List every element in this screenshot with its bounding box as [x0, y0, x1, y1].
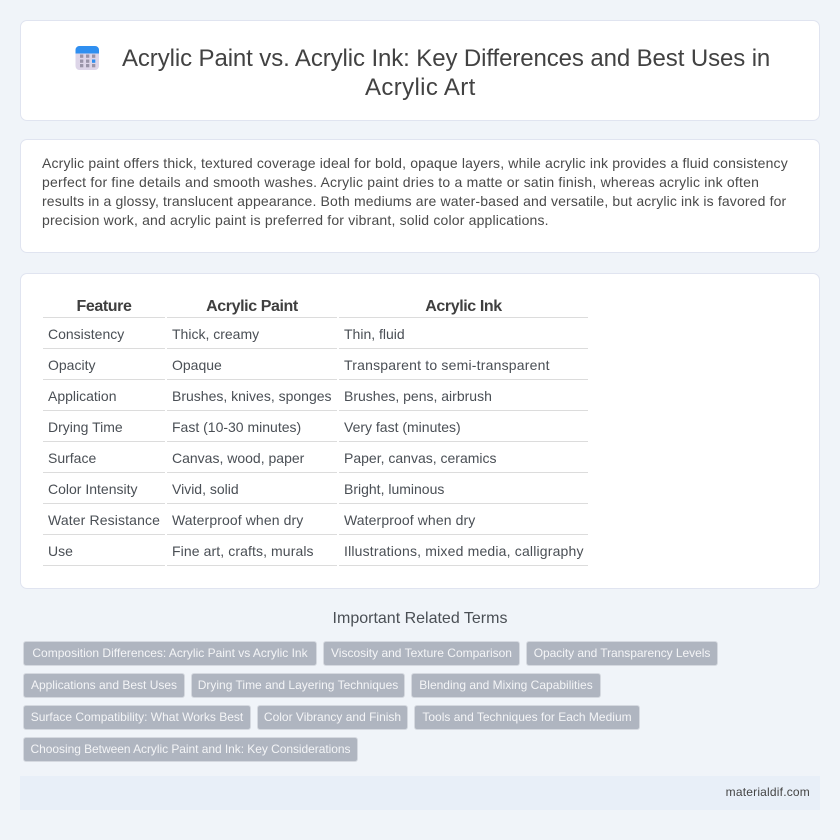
tag list: related terms: Viscosity and Texture Comparison	[331, 646, 512, 660]
panel: title header	[20, 20, 820, 121]
table row lines and cells: Water Resistance	[48, 512, 160, 528]
tag list: related terms: Choosing Between Acrylic Paint and Ink: Key Considerations	[31, 742, 350, 756]
table row lines and cells: Application	[48, 388, 116, 404]
table row lines and cells: Fast (10-30 minutes)	[172, 419, 301, 435]
table row lines and cells: Illustrations, mixed media, calligraphy	[344, 543, 584, 559]
tag list: related terms	[23, 641, 718, 762]
table row lines and cells: Very fast (minutes)	[344, 419, 461, 435]
panel: summary paragraph	[20, 139, 820, 253]
table row lines and cells: Opacity	[48, 357, 95, 373]
tag list: related terms: Surface Compatibility: What Works Best	[31, 710, 243, 724]
heading: Acrylic Paint vs. Acrylic Ink: Key Differences and Best Uses in	[122, 45, 770, 72]
heading: related terms: Important Related Terms	[333, 610, 507, 627]
tag list: related terms: Blending and Mixing Capabilities	[419, 678, 593, 692]
table row lines and cells: Surface	[48, 450, 96, 466]
table row lines and cells	[43, 317, 588, 566]
panel: comparison table	[20, 273, 820, 589]
table row lines and cells: Fine art, crafts, murals	[172, 543, 314, 559]
tag list: related terms: Opacity and Transparency Levels	[534, 646, 710, 660]
footer bar	[20, 776, 820, 810]
table row lines and cells: Canvas, wood, paper	[172, 450, 304, 466]
table row lines and cells: Brushes, pens, airbrush	[344, 388, 492, 404]
tag list: related terms: Drying Time and Layering Techniques	[198, 678, 398, 692]
tag list: related terms: Tools and Techniques for Each Medium	[422, 710, 632, 724]
table row lines and cells: Vivid, solid	[172, 481, 239, 497]
tag list: related terms: Composition Differences: Acrylic Paint vs Acrylic Ink	[32, 646, 308, 660]
table row lines and cells: Use	[48, 543, 73, 559]
text block: summary: results in a glossy, translucent appearance. Both mediums are water-based and versatile, but acrylic ink is favored for	[42, 193, 786, 209]
table row lines and cells: Bright, luminous	[344, 481, 444, 497]
table row lines and cells: Color Intensity	[48, 481, 137, 497]
table row lines and cells: Thick, creamy	[172, 326, 259, 342]
table header row: Acrylic Paint	[206, 298, 298, 315]
table header row: Feature	[76, 298, 132, 315]
tag list: related terms: Applications and Best Uses	[31, 678, 177, 692]
text block: summary	[42, 155, 788, 228]
tag list: related terms: Color Vibrancy and Finish	[264, 710, 401, 724]
icon: calendar palette	[76, 46, 99, 70]
table row lines and cells: Paper, canvas, ceramics	[344, 450, 497, 466]
table row lines and cells: Drying Time	[48, 419, 123, 435]
table header row	[76, 298, 502, 315]
table row lines and cells: Transparent to semi-transparent	[344, 357, 550, 373]
table row lines and cells: Thin, fluid	[344, 326, 405, 342]
footer source text: materialdif.com	[726, 785, 810, 799]
table row lines and cells: Brushes, knives, sponges	[172, 388, 332, 404]
heading: Acrylic Art	[365, 74, 476, 101]
table header row: Acrylic Ink	[425, 298, 502, 315]
text block: summary: Acrylic paint offers thick, textured coverage ideal for bold, opaque layers, while acrylic ink provides a fluid consistency	[42, 155, 788, 171]
table row lines and cells: Consistency	[48, 326, 124, 342]
table row lines and cells: Waterproof when dry	[172, 512, 303, 528]
heading	[122, 45, 770, 101]
table row lines and cells: Waterproof when dry	[344, 512, 475, 528]
table row lines and cells: Opaque	[172, 357, 222, 373]
text block: summary: precision work, and acrylic paint is preferred for vibrant, solid color applications.	[42, 212, 549, 228]
text block: summary: perfect for fine details and smooth washes. Acrylic paint dries to a matte or satin finish, whereas acrylic ink often	[42, 174, 759, 190]
